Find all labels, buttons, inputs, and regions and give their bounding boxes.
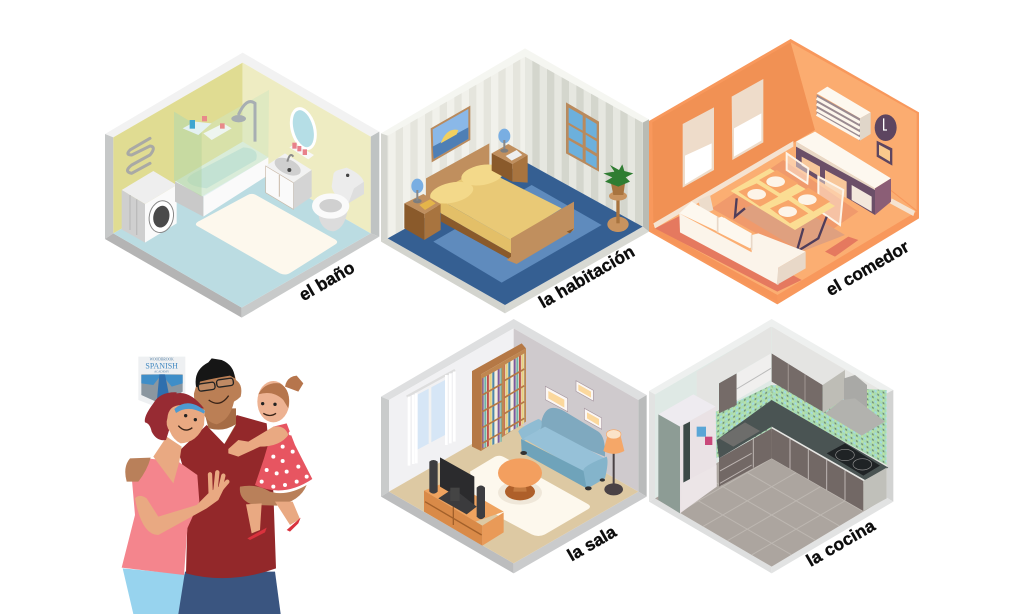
wall shelves bbox=[817, 87, 871, 141]
chairs bbox=[787, 153, 843, 225]
bathtub and glass bbox=[174, 90, 269, 217]
wall picture bbox=[431, 106, 470, 162]
woman head bbox=[145, 392, 205, 443]
school badge: SPANISH bbox=[145, 362, 178, 371]
label: la habitación: la habitación bbox=[535, 241, 638, 312]
worktop bbox=[717, 400, 888, 480]
window bbox=[566, 102, 599, 172]
man head bbox=[194, 358, 241, 424]
rug and shadows bbox=[655, 215, 802, 292]
man arm holding child bbox=[240, 485, 307, 506]
school badge: WOODBROOK bbox=[150, 358, 174, 362]
school badge bbox=[138, 357, 185, 408]
refrigerator bbox=[658, 394, 717, 513]
wall pictures bbox=[545, 381, 602, 429]
washing machine bbox=[122, 171, 177, 243]
tile backsplash bbox=[716, 385, 772, 458]
rug bbox=[470, 456, 590, 536]
sideboard bbox=[796, 132, 891, 215]
nightstand right bbox=[492, 129, 528, 183]
sink cabinet bbox=[266, 153, 312, 209]
base cabinets bbox=[719, 428, 887, 511]
label: el baño: el baño bbox=[295, 257, 358, 305]
sofa bbox=[679, 195, 806, 285]
man jeans bbox=[178, 572, 281, 614]
family illustration bbox=[122, 358, 312, 614]
bath mat bbox=[196, 194, 337, 275]
TV stand bbox=[424, 481, 504, 546]
bed bbox=[426, 143, 574, 264]
rug bbox=[433, 185, 602, 283]
child arm bbox=[228, 426, 288, 457]
room: la sala bbox=[381, 319, 647, 573]
wall picture bbox=[877, 141, 892, 166]
child dress bbox=[255, 423, 312, 490]
windows bbox=[683, 79, 763, 188]
label: el comedor: el comedor bbox=[822, 236, 913, 300]
sofa bbox=[518, 408, 608, 490]
plant on stand bbox=[603, 164, 633, 232]
man neck and collar bbox=[203, 408, 236, 443]
child head bbox=[257, 376, 303, 422]
man body bbox=[178, 415, 276, 578]
floor tile lines bbox=[690, 458, 864, 555]
mirror and shelf bbox=[285, 104, 321, 159]
woman jeans bbox=[123, 568, 185, 614]
baseboards bbox=[653, 141, 793, 228]
man hand around woman bbox=[125, 458, 151, 482]
woman body bbox=[122, 458, 199, 575]
label: la cocina: la cocina bbox=[803, 515, 879, 570]
toilet bbox=[312, 168, 364, 231]
TV and speakers bbox=[429, 457, 485, 519]
room: la habitación bbox=[381, 48, 649, 313]
room: el baño bbox=[105, 53, 379, 318]
range hood bbox=[825, 375, 885, 436]
floor lamp bbox=[603, 430, 624, 495]
room: el comedor bbox=[649, 39, 919, 304]
dining table bbox=[731, 168, 835, 252]
wall clock bbox=[875, 114, 897, 141]
window with curtains bbox=[407, 370, 455, 466]
school badge: ACADEMY bbox=[154, 369, 170, 373]
child legs and shoes bbox=[246, 502, 300, 533]
woman neck bbox=[153, 437, 182, 483]
label: la sala: la sala bbox=[564, 521, 620, 565]
coffee table bbox=[498, 458, 542, 505]
heated towel rail bbox=[127, 138, 153, 173]
upper cabinets and shelves bbox=[697, 327, 845, 413]
woman arm front bbox=[135, 482, 227, 535]
nightstand left bbox=[404, 179, 441, 240]
bookcase bbox=[472, 343, 526, 451]
room: la cocina bbox=[649, 319, 894, 574]
